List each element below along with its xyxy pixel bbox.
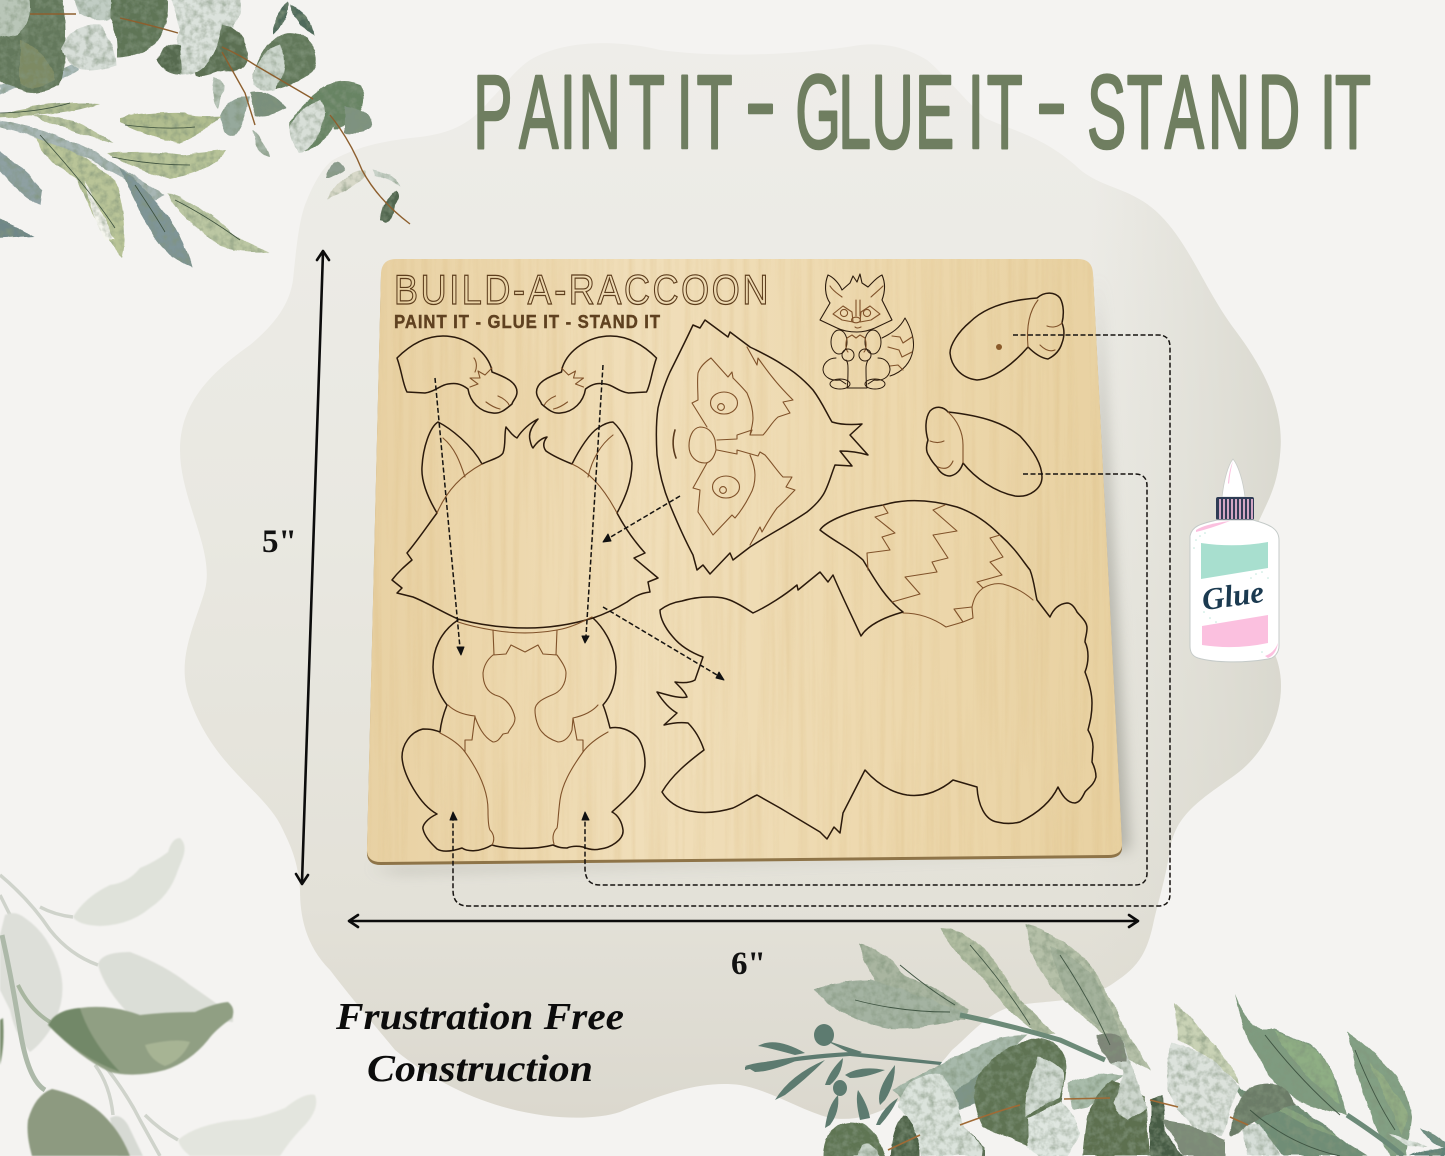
dimension arrow: width [349, 915, 1138, 927]
puzzle piece: right arm [536, 336, 656, 413]
foliage: top-left watercolor leaves [0, 0, 410, 268]
puzzle piece: left arm [397, 336, 517, 413]
board engraved subtitle: PAINT IT - GLUE IT - STAND IT [394, 312, 661, 332]
puzzle piece: lower hind paw [926, 407, 1042, 496]
guide: lower hind paw to right foot [582, 474, 1147, 885]
icon: glue bottle [1190, 459, 1279, 662]
guide: right arm to body [582, 365, 603, 643]
title: paint it, glue it, stand it: STAND IT [1087, 54, 1371, 171]
puzzle piece: sitting body front [402, 618, 645, 851]
title: paint it, glue it, stand it: GLUE IT [795, 54, 1023, 171]
foliage: bottom-left soft leaves [0, 838, 316, 1156]
guide: head to back body [603, 607, 724, 680]
dimension arrow: height [296, 251, 329, 884]
wooden board [360, 255, 1130, 872]
dark leaves [0, 1002, 233, 1156]
guide: face to head [603, 496, 680, 542]
tagline: frustration free construction: Frustration Free [335, 996, 624, 1038]
title: paint it, glue it, stand it: PAINT IT [473, 54, 733, 171]
twig with buds [745, 1024, 942, 1128]
thumbnail: finished raccoon [820, 274, 914, 389]
label: 6 inches: 6" [731, 946, 766, 982]
scalloped background blob [180, 43, 1281, 1119]
label: 5 inches: 5" [262, 524, 297, 560]
puzzle piece: upper hind paw [950, 293, 1064, 380]
foliage: bottom-right watercolor leaves [745, 925, 1445, 1156]
icon: glue bottle: Glue [1200, 574, 1266, 617]
guide: left arm to body [435, 378, 464, 655]
tagline: frustration free construction [335, 996, 624, 1090]
guide: upper hind paw to left foot [450, 335, 1170, 906]
board engraved title: build-a-raccoon: BUILD-A-RACCOON [394, 266, 771, 313]
title: paint it, glue it, stand it: - [1036, 43, 1067, 160]
puzzle piece: raccoon face [656, 320, 868, 574]
tagline: frustration free construction: Construction [367, 1048, 593, 1090]
pale leaves [0, 838, 316, 1156]
puzzle piece: body back with tail [657, 501, 1096, 839]
title: paint it, glue it, stand it [473, 43, 1371, 171]
title: paint it, glue it, stand it: - [745, 43, 776, 160]
puzzle piece: head back with ears [392, 419, 658, 633]
